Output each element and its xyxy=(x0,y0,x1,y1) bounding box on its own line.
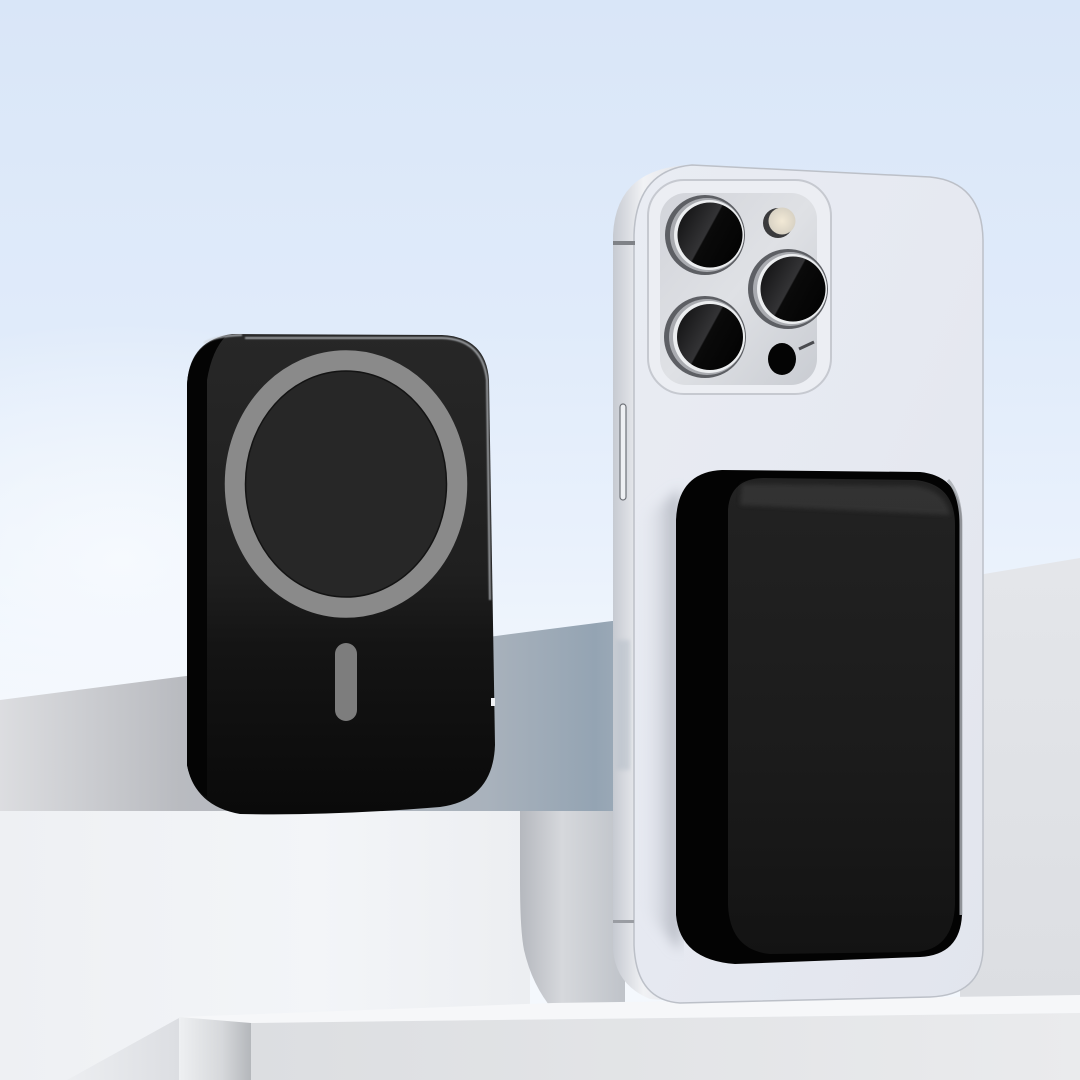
lens right xyxy=(748,249,828,329)
bump plate xyxy=(660,193,817,385)
magnetic ring xyxy=(235,360,457,608)
ring inner dark line xyxy=(246,371,446,597)
phone xyxy=(613,165,983,1003)
front face xyxy=(728,478,955,954)
phone side frame xyxy=(613,165,700,1003)
lower step front face xyxy=(251,1013,1080,1080)
bump outer xyxy=(648,180,831,394)
upper step face xyxy=(0,811,530,1080)
upper step side in shadow xyxy=(520,811,625,1010)
body dark side xyxy=(676,470,962,964)
camera bump xyxy=(648,180,831,394)
small white port detail xyxy=(491,698,495,706)
lower step top xyxy=(179,995,1080,1023)
right block behind phone xyxy=(960,558,1080,1010)
lens top xyxy=(665,195,745,275)
left darker edge xyxy=(187,336,226,797)
scene: stepped white platforms xyxy=(0,558,1080,1080)
side button xyxy=(620,404,626,500)
lower antenna line xyxy=(613,920,634,923)
top and right highlight xyxy=(204,335,490,600)
lens bottom xyxy=(664,296,746,378)
lower block side facet xyxy=(179,1017,251,1080)
sky glow on the left xyxy=(0,320,480,800)
top sheen xyxy=(740,484,950,515)
lower side shading xyxy=(616,640,630,770)
lower left slope shadow xyxy=(67,1018,179,1080)
rear wall with sloped top xyxy=(0,621,640,830)
power bank left (magnetic side) xyxy=(187,334,495,814)
flash xyxy=(763,208,796,238)
right grey edge xyxy=(948,480,961,915)
soft shadow of battery on phone xyxy=(640,490,680,950)
power bank on phone xyxy=(676,470,962,964)
mic mark xyxy=(799,342,814,349)
body xyxy=(187,334,495,814)
side band antenna line xyxy=(613,241,635,245)
lidar sensor xyxy=(768,343,796,375)
alignment pill xyxy=(335,643,357,721)
phone back plate xyxy=(634,165,983,1003)
